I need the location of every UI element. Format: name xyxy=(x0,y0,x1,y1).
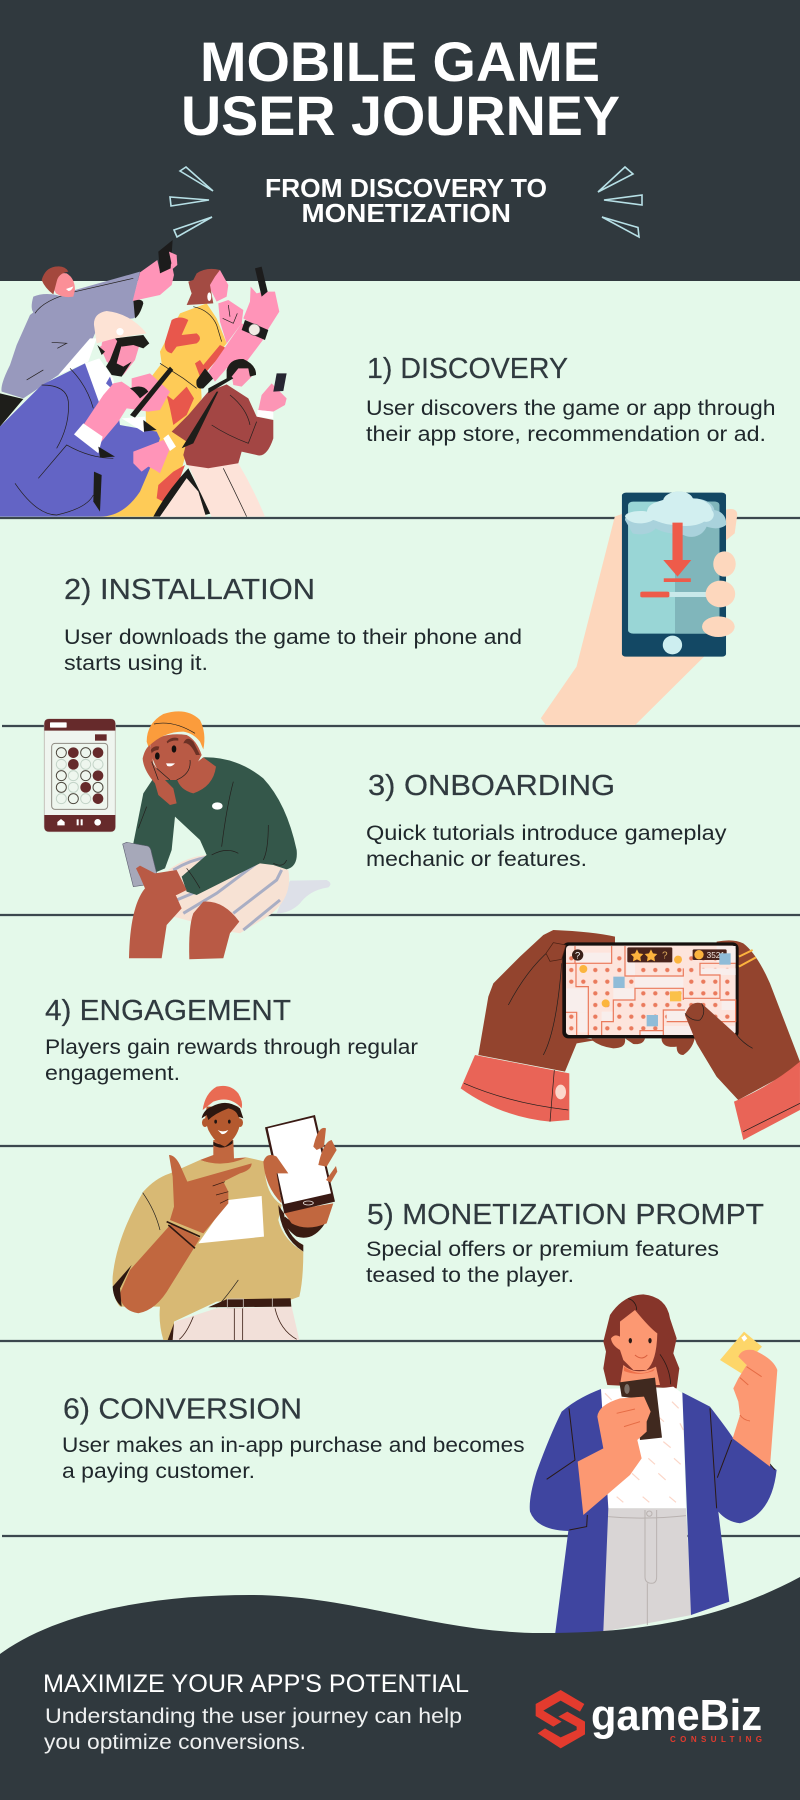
icon: hexagon logo mark xyxy=(536,1690,585,1748)
title xyxy=(181,30,620,147)
text: conversion body xyxy=(62,1433,524,1483)
footer text: you optimize conversions. xyxy=(44,1730,306,1754)
text: monetization body xyxy=(366,1237,719,1287)
heading: 5 monetization prompt: 5) MONETIZATION PROMPT xyxy=(367,1199,764,1231)
subtitle xyxy=(265,173,547,228)
tagline: CONSULTING xyxy=(670,1735,762,1744)
illustration: hands holding phone with maze game: ? xyxy=(575,950,580,960)
illustration: hand holding phone downloading xyxy=(541,492,737,725)
footer text: Understanding the user journey can help xyxy=(45,1704,462,1728)
text: onboarding body: Quick tutorials introduce gameplay xyxy=(366,821,727,845)
text: engagement body: Players gain rewards through regular xyxy=(45,1035,418,1059)
text: engagement body xyxy=(45,1035,418,1085)
heading: 3 onboarding: 3) ONBOARDING xyxy=(368,770,615,802)
subtitle: FROM DISCOVERY TO xyxy=(265,173,547,203)
footer wave xyxy=(0,1577,800,1800)
text: onboarding body: mechanic or features. xyxy=(366,847,587,871)
heading: 6 conversion: 6) CONVERSION xyxy=(63,1394,302,1426)
heading: 4 engagement: 4) ENGAGEMENT xyxy=(45,995,291,1027)
text: engagement body: engagement. xyxy=(45,1061,180,1085)
footer text xyxy=(44,1704,462,1754)
text: installation body: starts using it. xyxy=(64,651,208,675)
wordmark: gameBiz xyxy=(591,1691,762,1740)
text: monetization body: Special offers or premium features xyxy=(366,1237,719,1261)
text: installation body xyxy=(64,625,522,675)
heading: 2 installation: 2) INSTALLATION xyxy=(64,574,315,606)
illustration: woman paying with card xyxy=(530,1294,777,1635)
icon: left rays xyxy=(170,167,213,237)
text: discovery body xyxy=(366,396,776,446)
text: discovery body: their app store, recommendation or ad. xyxy=(366,422,766,446)
text: discovery body: User discovers the game or app through xyxy=(366,396,776,420)
illustration: man pointing at phone xyxy=(113,1086,337,1340)
footer heading: MAXIMIZE YOUR APP'S POTENTIAL xyxy=(43,1670,469,1698)
text: monetization body: teased to the player. xyxy=(366,1263,574,1287)
subtitle: MONETIZATION xyxy=(302,198,511,228)
text: onboarding body xyxy=(366,821,727,871)
text: installation body: User downloads the game to their phone and xyxy=(64,625,522,649)
illustration: hands holding phone with maze game: 3521 xyxy=(707,950,725,960)
illustration: hands holding phone with maze game xyxy=(461,930,800,1140)
heading: 1 discovery: 1) DISCOVERY xyxy=(367,353,568,385)
logo: gameBiz consulting xyxy=(536,1690,762,1748)
text: conversion body: User makes an in-app purchase and becomes xyxy=(62,1433,524,1457)
title: MOBILE GAME xyxy=(200,30,600,93)
text: conversion body: a paying customer. xyxy=(62,1459,255,1483)
illustration: man sitting looking at phone xyxy=(123,711,330,959)
illustration: puzzle game phone xyxy=(44,719,115,832)
illustration: crowd on phones xyxy=(0,240,287,517)
title: USER JOURNEY xyxy=(181,84,620,147)
icon: right rays xyxy=(598,167,642,237)
illustration: hands holding phone with maze game: ? xyxy=(662,950,668,961)
